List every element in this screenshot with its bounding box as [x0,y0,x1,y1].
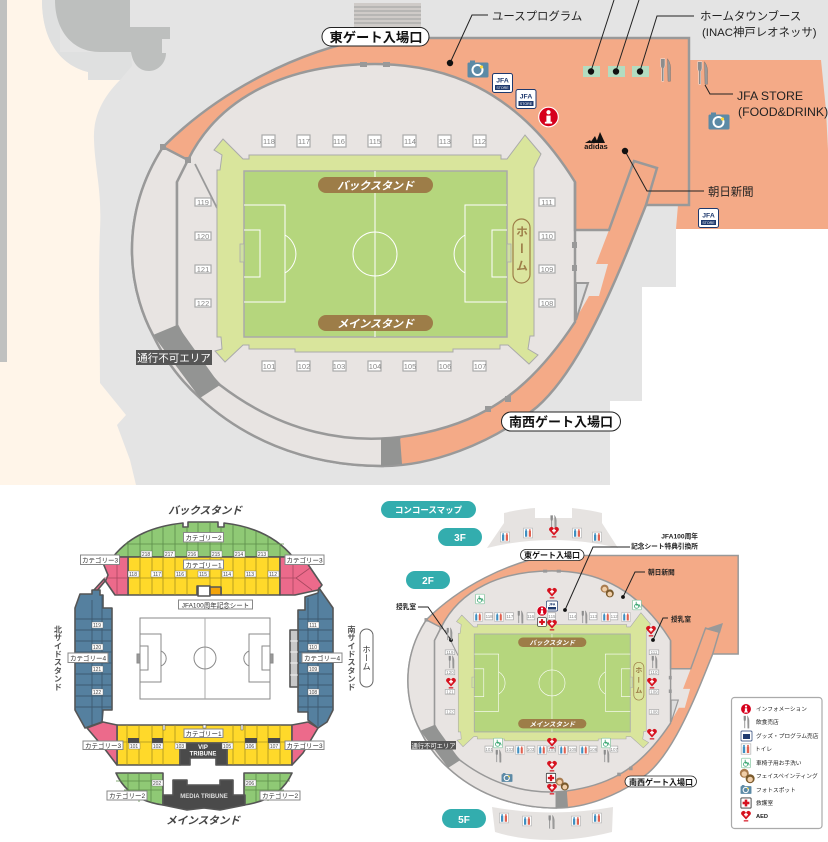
legend: photo spot: フォトスポット [756,786,796,794]
seat map category labels: カテゴリー3 [286,556,323,564]
section numbers main plan: 111 [541,198,553,207]
legend: goods shop: グッズ・プログラム売店 [756,732,819,740]
seat map [75,522,333,810]
seat map section numbers [92,551,319,787]
concourse section numbers: 115 [548,614,556,619]
callout: nursing room right: 授乳室 [671,614,691,624]
seat map category labels: カテゴリー2 [262,791,298,800]
legend: information: インフォメーション [756,706,807,713]
callout: asahi shimbun: 朝日新聞 [708,186,754,198]
concourse icons: JFA [549,602,556,606]
section numbers main plan [195,135,555,371]
seat map section numbers: 217 [165,552,173,558]
stadium main plan [132,38,689,466]
concourse section numbers: ホーム [635,666,643,696]
seat map section numbers: 118 [129,572,137,578]
icon: camera [468,60,488,78]
ramp top wedge [705,623,723,633]
callout: asahi concourse [621,568,675,599]
concourse section numbers: 122 [446,710,454,715]
seat map section numbers: 218 [142,552,150,558]
seat map section numbers: 103 [176,744,184,750]
icon: JFA store: STORE [520,102,533,106]
seat map category labels: カテゴリー3 [286,741,323,750]
legend: accessible toilet: 車椅子用お手洗い [756,759,802,767]
seat map category labels: カテゴリー1 [185,560,222,570]
section numbers main plan: 116 [333,137,345,146]
concourse icons [446,515,657,829]
southwest gate label: 南西ゲート入場口 [509,414,613,430]
seat map section numbers: 117 [153,572,161,578]
callout: hometown booth: (INAC神戸レオネッサ) [702,25,817,39]
seat map section numbers: 216 [188,552,196,558]
seats: category 1 main [117,725,292,765]
5F deck [492,807,613,840]
seat map section numbers: 206 [246,781,254,787]
legend [732,698,822,828]
concourse section numbers: 121 [446,690,454,695]
concourse gate label southwest: 南西ゲート入場口 [629,777,693,787]
seats: category 4 south [290,588,333,728]
icon: camera [708,112,730,130]
concourse section numbers: 109 [650,690,658,695]
callout: JFA 100th seat exchange [563,532,698,612]
seat map category labels: カテゴリー4 [70,654,106,662]
seats: category 2 main [116,773,292,805]
VIP tribune: TRIBUNE [190,752,216,758]
VIP tribune: VIP [198,745,208,751]
label: no entry area: 通行不可エリア [137,352,211,364]
3F deck [487,508,618,548]
section numbers main plan: 121 [197,265,209,274]
section numbers main plan: 107 [474,362,486,371]
section numbers main plan: 101 [263,362,275,371]
seats: category 3 back right [280,557,322,595]
floor 3F: 3F [454,533,466,544]
label: back stand: バックスタンド [337,180,415,192]
seat map section numbers: 102 [153,744,161,750]
section numbers main plan: 109 [541,265,553,274]
seats: category 2 back [113,522,293,557]
stairs [354,3,421,27]
icon: adidas: adidas [584,142,608,151]
callout: JFA store food and drink: (FOOD&DRINK) [738,105,828,119]
seat map category labels: カテゴリー2 [109,791,145,800]
seat map category labels: カテゴリー3 [85,741,121,750]
concourse section numbers: 118 [486,614,493,619]
icon: JFA store: JFA [702,212,715,220]
icon: JFA store: STORE [702,221,715,225]
concourse section numbers: 101 [485,747,493,752]
top map background [0,0,828,485]
concourse section numbers: 114 [569,614,577,619]
section numbers main plan: 106 [439,362,451,371]
seat map section numbers: 122 [93,690,101,696]
floor 2F: 2F [422,576,434,587]
legend: first aid: 救護室 [756,799,773,807]
section numbers main plan: 122 [197,299,209,308]
concourse section numbers: バックスタンド [530,639,575,647]
callout: youth programme [447,9,582,66]
concourse section numbers: 110 [650,670,658,675]
section numbers main plan: 105 [404,362,416,371]
concourse section numbers: 112 [611,614,618,619]
icon: adidas [584,132,608,151]
callout: JFA store food and drink [705,85,828,119]
seat map section numbers: 107 [270,744,278,750]
callout: JFA 100th seat exchange: JFA100周年 [661,532,698,540]
seat map section numbers: 108 [309,690,317,696]
building [55,0,170,71]
seat map section numbers: 101 [130,744,138,750]
booths [583,66,649,77]
seat map section numbers: 215 [212,552,220,558]
callout: hometown booth: ホームタウンブース [700,9,801,23]
legend: food shop: 飲食売店 [756,718,779,726]
concourse section numbers: 104 [548,747,556,752]
concourse section numbers [445,613,659,752]
icon: cutlery [661,59,671,81]
section numbers main plan: 102 [298,362,310,371]
legend: toilet: トイレ [755,747,772,753]
legend: AED: AED [756,814,768,820]
section numbers main plan: 113 [439,137,451,146]
icon: JFA store [698,208,718,228]
concourse section numbers: 116 [527,614,535,619]
legend: face painting: フェイスペインティング [756,772,818,780]
seat map section numbers: 106 [246,744,254,750]
field seat map [137,618,273,699]
southwest gate label [502,412,620,431]
seat map section numbers: 110 [309,645,317,651]
callout: nursing room left: 授乳室 [396,602,416,611]
section numbers main plan: 118 [263,137,275,146]
seat map category labels: カテゴリー1 [185,729,222,738]
seat map section numbers: 120 [93,645,101,651]
concourse section numbers: 119 [446,650,454,655]
floor 3F [438,528,482,546]
section numbers main plan: 114 [404,137,416,146]
seat map category labels: カテゴリー3 [82,556,118,564]
east gate label: 東ゲート入場口 [329,29,423,45]
seat map section numbers: 116 [176,572,184,578]
concourse section numbers: 102 [506,747,514,752]
concourse section numbers: メインスタンド [530,720,576,728]
concourse section numbers: 111 [651,650,658,655]
seat map section numbers: 114 [223,572,231,578]
icon: JFA store: STORE [496,86,509,90]
icon: cutlery [698,62,708,84]
VIP tribune [180,743,227,765]
concourse section numbers: 108 [650,710,658,715]
seat map title: north side stand: 北サイドスタンド [53,624,62,691]
concourse section numbers: 113 [590,614,598,619]
concourse section numbers: 120 [446,670,454,675]
label: home: ホーム [514,225,528,276]
seat map title: back stand: バックスタンド [168,505,243,517]
icon: information [539,107,558,127]
concourse section numbers: 107 [611,747,618,752]
media tribune: MEDIA TRIBUNE [180,794,228,800]
concourse section numbers: 105 [569,747,577,752]
seat map section numbers: 113 [246,572,254,578]
seat map section numbers: 109 [309,667,317,673]
seat map category labels: カテゴリー2 [185,533,222,542]
section numbers main plan: 112 [474,137,486,146]
icon: JFA store [516,90,536,108]
callout: hometown booth [637,9,817,75]
concourse no entry label: 通行不可エリア [411,741,456,750]
section numbers main plan: 110 [541,232,553,241]
section numbers main plan: 108 [541,299,553,308]
floor 2F [406,571,450,589]
icon: JFA store [492,74,512,92]
section numbers main plan: 104 [369,362,381,371]
seat map section numbers: 111 [309,623,317,629]
callout: youth programme: ユースプログラム [492,9,582,23]
callout: asahi shimbun [622,148,754,198]
section numbers main plan: 117 [298,137,310,146]
section numbers main plan: 120 [197,232,209,241]
floor 5F [442,809,486,828]
concourse section numbers: 117 [506,614,514,619]
seats: category 4 north [75,590,112,728]
seat map category labels [68,532,342,800]
icon: JFA store: JFA [520,94,532,100]
section numbers main plan: 119 [197,198,209,207]
seat map home label: ホーム [362,645,372,671]
seat map section numbers: 202 [153,781,161,787]
seat map section numbers: 121 [93,667,101,673]
seat map category labels: JFA100周年記念シート [182,600,249,609]
seat map section numbers: 214 [235,552,243,558]
media tribune [163,780,245,810]
seat map title: south side stand: 南サイドスタンド [346,624,356,691]
callout: nursing room left [396,602,453,642]
icon: JFA store: JFA [496,78,509,84]
callout: asahi concourse: 朝日新聞 [648,568,675,576]
seats: category 1 back [128,557,280,596]
seat map section numbers: 112 [269,572,277,578]
seat map section numbers: 105 [223,744,231,750]
callout: booth leaders [588,0,639,75]
callout: nursing room right [651,614,691,642]
seat map section numbers: 115 [199,572,207,578]
callout: JFA 100th seat exchange: 記念シート特典引換所 [631,542,698,550]
floor 5F: 5F [458,815,470,826]
seats: category 3 main [87,722,318,765]
seat map section numbers: 213 [258,552,266,558]
seat map category labels: カテゴリー4 [304,654,340,662]
section numbers main plan: 115 [369,137,381,146]
concourse section numbers: 103 [527,747,535,752]
concourse map heading: コンコースマップ [395,505,463,515]
callout: JFA store food and drink: JFA STORE [737,89,803,103]
concourse section numbers: 106 [590,747,598,752]
seat map section numbers: 119 [93,623,101,629]
seats: category 3 back left [93,557,128,595]
concourse stadium plan [408,556,738,808]
section numbers main plan: 103 [333,362,345,371]
concourse gate label east: 東ゲート入場口 [524,550,580,560]
label: main stand: メインスタンド [337,318,415,330]
concourse map heading [381,501,476,518]
seat map home label [360,629,373,687]
seat map title: main stand: メインスタンド [166,815,241,827]
